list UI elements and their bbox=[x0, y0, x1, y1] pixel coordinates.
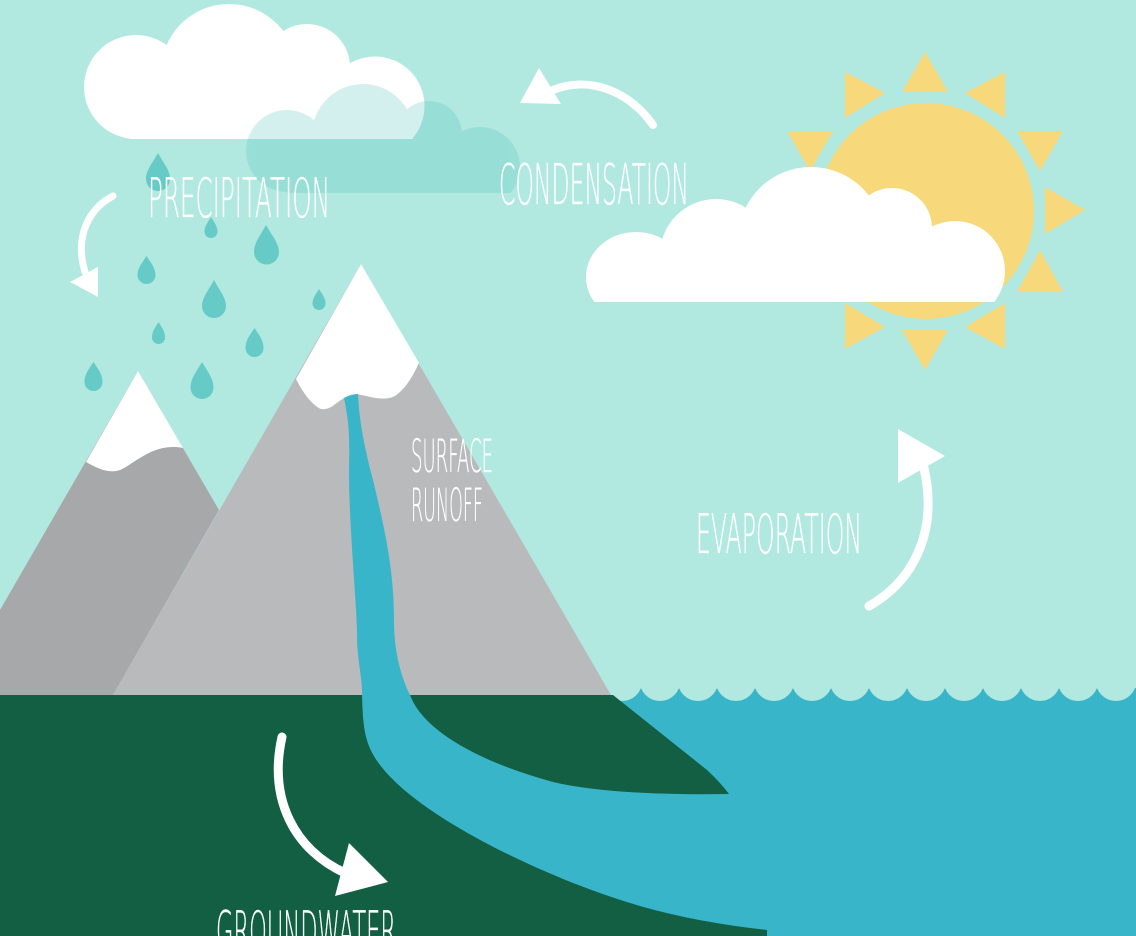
text: PRECIPITATION bbox=[148, 167, 330, 230]
text: CONDENSATION bbox=[499, 153, 689, 218]
arrow: groundwater bbox=[278, 737, 388, 896]
text: EVAPORATION bbox=[696, 503, 862, 566]
cloud: top white bbox=[84, 4, 424, 139]
arrow: precipitation bbox=[70, 196, 113, 297]
sea bbox=[360, 660, 1136, 936]
mountain: small left bbox=[0, 371, 219, 695]
mountain: large bbox=[113, 264, 611, 695]
cloud: translucent teal bbox=[246, 84, 520, 193]
rain drops bbox=[84, 153, 326, 399]
river bbox=[344, 394, 411, 698]
cloud: front of sun bbox=[586, 167, 1005, 302]
text: SURFACE bbox=[411, 430, 493, 483]
label: surface runoff bbox=[411, 430, 493, 532]
sun bbox=[787, 52, 1085, 370]
text: RUNOFF bbox=[411, 479, 483, 532]
ground bbox=[0, 695, 767, 936]
snow cap: large mountain bbox=[296, 264, 419, 409]
arrow: condensation bbox=[520, 68, 653, 125]
arrow: evaporation bbox=[869, 429, 945, 606]
snow cap: small mountain bbox=[86, 371, 183, 471]
